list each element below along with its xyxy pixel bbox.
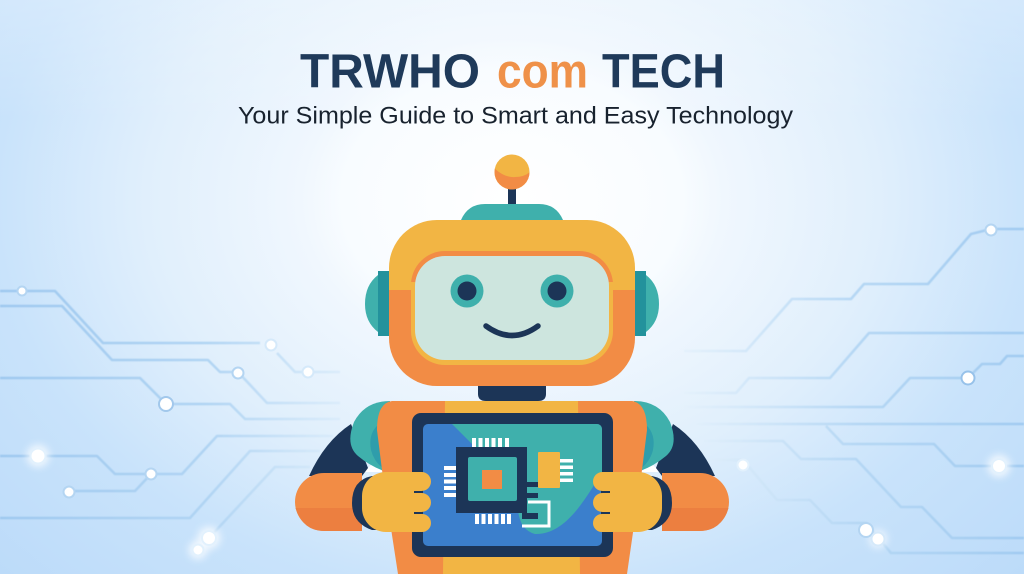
left hand and forearm xyxy=(295,472,431,532)
antenna xyxy=(494,154,531,205)
title: com xyxy=(497,46,588,98)
circuit lines right xyxy=(684,229,1024,553)
right hand and forearm xyxy=(593,472,729,532)
head xyxy=(389,220,635,386)
chip xyxy=(444,438,549,526)
subtitle: Your Simple Guide to Smart and Easy Technology xyxy=(238,102,794,130)
small yellow component xyxy=(538,452,573,488)
circuit nodes right xyxy=(738,224,1010,548)
left ear xyxy=(365,271,389,336)
neck xyxy=(478,384,546,401)
visor frame xyxy=(411,251,613,365)
tablet xyxy=(412,413,613,557)
right ear xyxy=(635,271,659,336)
title xyxy=(300,46,725,98)
circuit nodes left xyxy=(18,286,314,559)
smile xyxy=(486,326,538,336)
circuit lines left xyxy=(0,291,340,538)
tablet screen xyxy=(423,424,602,546)
left arm xyxy=(309,401,390,476)
head cap xyxy=(461,204,563,220)
robot xyxy=(295,154,729,574)
title: TECH xyxy=(602,46,725,98)
right arm xyxy=(634,401,715,476)
face screen xyxy=(415,256,609,360)
title: TRWHO xyxy=(300,46,480,98)
right eye xyxy=(540,274,574,308)
torso xyxy=(377,401,647,574)
left eye xyxy=(450,274,484,308)
